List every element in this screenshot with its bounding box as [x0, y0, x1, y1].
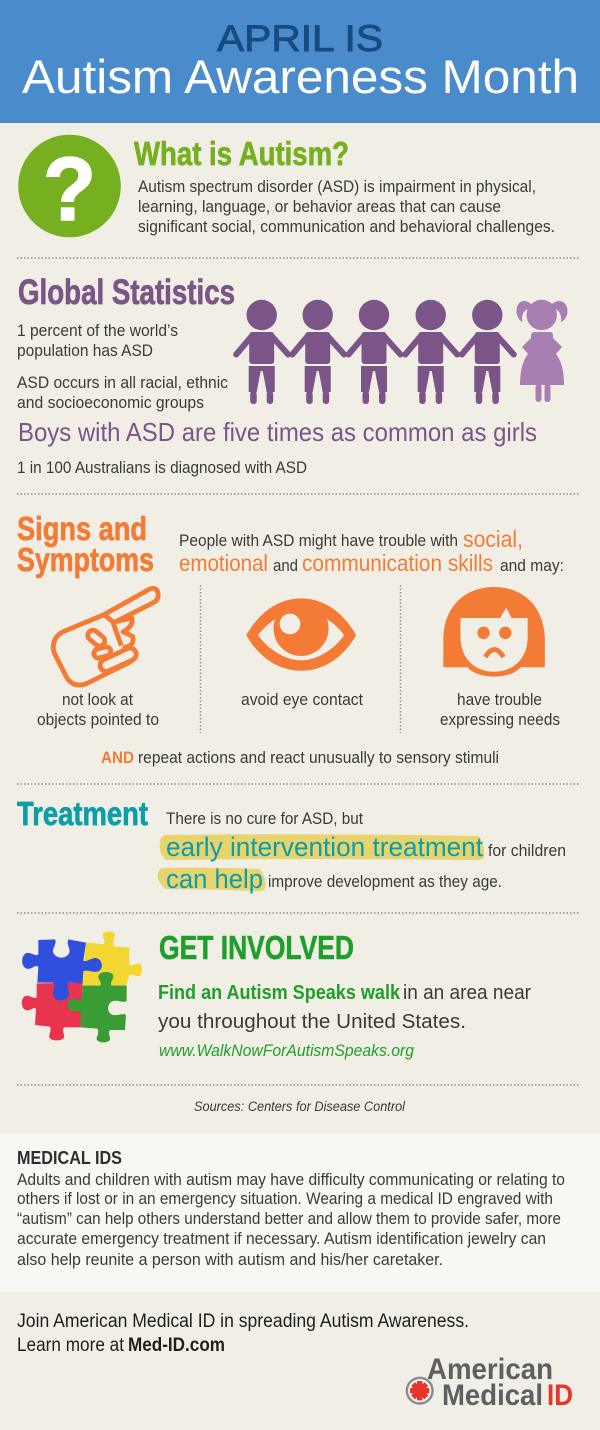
- panel: get involved: [22, 929, 531, 1060]
- text block: all groups: [17, 374, 228, 412]
- icon: puzzle pieces: [22, 931, 142, 1042]
- text: early intervention treatment: early intervention treatment: [166, 832, 483, 862]
- text block: medical id explanation: also help reunite a person with autism and his/her caretaker.: [17, 1251, 443, 1269]
- text block: medical id explanation: Adults and children with autism may have difficulty communicating or relating to: [17, 1171, 565, 1189]
- logo: American Medical ID: ID: [547, 1379, 573, 1412]
- text block: find a walk: you throughout the United States.: [158, 1011, 466, 1033]
- logo: American Medical ID: American: [427, 1353, 553, 1386]
- text block: symptoms intro: communication skills: [302, 550, 493, 576]
- text block: Australians: 1 in 100 Australians is diagnosed with ASD: [17, 459, 307, 477]
- text block: one percent: population has ASD: [17, 342, 153, 360]
- text block: all groups: ASD occurs in all racial, ethnic: [17, 374, 228, 392]
- text block: find a walk: [158, 982, 531, 1033]
- icon: sad face: [443, 587, 545, 677]
- icon: pointing hand: [53, 588, 158, 685]
- header banner: [0, 0, 600, 123]
- heading: signs and symptoms: [17, 510, 154, 578]
- heading: medical ids: MEDICAL IDS: [17, 1148, 122, 1168]
- caption: avoid eye contact: avoid eye contact: [241, 691, 363, 709]
- highlight: early intervention treatment: [160, 834, 484, 860]
- heading: what is autism: What is Autism?: [134, 135, 349, 172]
- heading: global statistics: Global Statistics: [18, 273, 235, 312]
- link: walk website: www.WalkNowForAutismSpeaks.org: [159, 1042, 415, 1060]
- text block: definition: Autism spectrum disorder (ASD) is impairment in physical,: [138, 178, 536, 196]
- icon: girl: [516, 300, 568, 402]
- text block: medical id explanation: others if lost or in an emergency situation. Wearing a medical ID engraved with: [17, 1190, 553, 1208]
- text block: symptoms intro: People with ASD might have trouble with: [179, 532, 458, 550]
- caption: not look at: not look at: [62, 691, 133, 709]
- call to action: Med-ID.com: [128, 1335, 225, 1356]
- text block: definition: significant social, communication and behavioral challenges.: [138, 218, 555, 236]
- heading: signs and symptoms: Signs and: [17, 510, 147, 547]
- heading: get involved: GET INVOLVED: [159, 929, 354, 966]
- logo: American Medical ID: [407, 1353, 573, 1412]
- text block: medical id explanation: accurate emergency treatment if necessary. Autism identification jewelry can: [17, 1230, 546, 1248]
- call to action: Join American Medical ID in spreading Autism Awareness.: [17, 1311, 469, 1332]
- panel: what is autism: [18, 135, 555, 240]
- text block: definition: learning, language, or behavior areas that can cause: [138, 198, 501, 216]
- caption: trouble expressing needs: have trouble: [457, 691, 542, 709]
- text: can help: can help: [166, 864, 263, 894]
- text: can help: improve development as they age.: [268, 873, 502, 891]
- highlight: can help: [158, 868, 265, 891]
- caption: trouble expressing needs: [440, 691, 560, 729]
- caption: trouble expressing needs: expressing needs: [440, 711, 560, 729]
- icon: medical symbol: [407, 1378, 433, 1403]
- heading: treatment: Treatment: [17, 795, 148, 832]
- caption: not look at: [37, 691, 159, 729]
- panel: signs and symptoms: [17, 510, 564, 767]
- text block: all groups: and socioeconomic groups: [17, 394, 204, 412]
- text block: symptoms intro: emotional: [179, 550, 268, 576]
- title: April is: APRIL IS: [217, 18, 383, 59]
- call to action: [17, 1311, 469, 1356]
- text block: one percent: [17, 322, 178, 360]
- caption: not look at: objects pointed to: [37, 711, 159, 729]
- text block: symptoms intro: social,: [463, 526, 523, 552]
- icon: question mark: [18, 135, 121, 240]
- text block: definition: [138, 178, 555, 236]
- text block: and repeat actions: repeat actions and react unusually to sensory stimuli: [138, 749, 499, 767]
- text: can help: [166, 864, 502, 894]
- callout: boys vs girls: Boys with ASD are five times as common as girls: [18, 417, 537, 447]
- text block: symptoms intro: and: [273, 557, 298, 575]
- call to action: Learn more at: [17, 1335, 125, 1356]
- text block: symptoms intro: and may:: [500, 557, 564, 575]
- text block: and repeat actions: AND: [101, 749, 134, 767]
- text block: find a walk: in an area near: [403, 982, 531, 1004]
- icon: five boys holding hands: [236, 300, 514, 404]
- text: early intervention treatment: for children: [488, 842, 566, 860]
- text block: symptoms intro: [179, 526, 564, 576]
- panel: global statistics: [17, 273, 568, 477]
- text block: one percent: 1 percent of the world’s: [17, 322, 178, 340]
- panel: treatment: [17, 795, 566, 894]
- icon: eye: [246, 598, 356, 671]
- logo: American Medical ID: Medical: [442, 1379, 543, 1412]
- text block: find a walk: Find an Autism Speaks walk: [158, 982, 401, 1004]
- heading: signs and symptoms: Symptoms: [17, 541, 154, 578]
- panel: medical ids: [0, 1134, 600, 1292]
- sources: Sources: Centers for Disease Control: [194, 1099, 406, 1114]
- text block: medical id explanation: “autism” can help others understand better and allow them to provide safer, more: [17, 1210, 561, 1228]
- text block: medical id explanation: [17, 1171, 565, 1269]
- icon: question mark: ?: [43, 140, 96, 240]
- text: no cure: There is no cure for ASD, but: [166, 810, 363, 828]
- title: Autism Awareness Month: Autism Awareness Month: [22, 50, 579, 103]
